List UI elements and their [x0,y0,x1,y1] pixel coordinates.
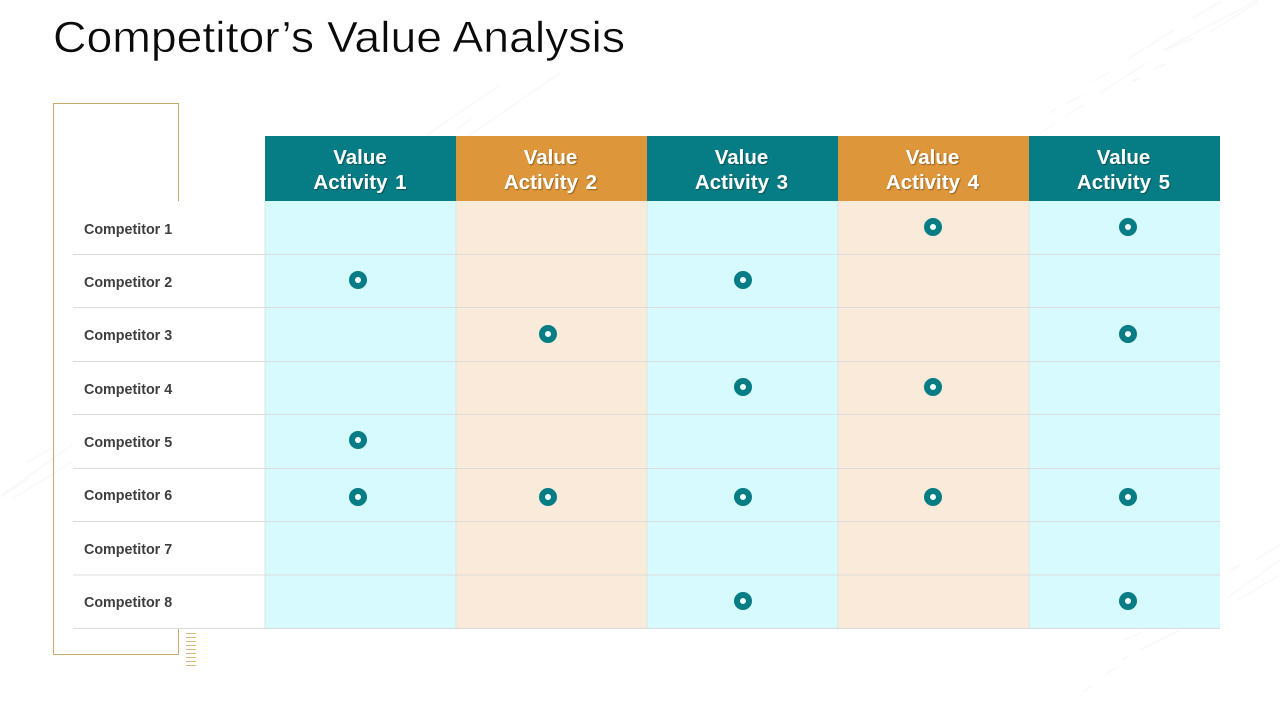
header: Value Activity 1 [265,136,456,201]
column shading [265,201,1220,628]
header: Value Activity 4 [838,136,1029,201]
row labels: Competitor 7 [84,542,172,558]
header: Value Activity 3: Value [715,146,768,169]
row labels: Competitor 1 [84,222,172,238]
header: Value Activity 2: Activity 2 [504,171,597,194]
header: Value Activity 4: Value [906,146,959,169]
row labels: Competitor 2 [84,275,172,291]
header: Value Activity 3 [647,136,838,201]
header: Value Activity 4: Activity 4 [886,171,980,194]
header: Value Activity 3: Activity 3 [695,171,788,194]
header: Value Activity 5 [1029,136,1220,201]
row labels: Competitor 5 [84,435,172,451]
header: Value Activity 1: Value [333,146,387,169]
row labels: Competitor 6 [84,488,172,504]
row labels: Competitor 8 [84,595,172,611]
header: Value Activity 2 [456,136,647,201]
value activity table [73,136,1220,628]
decorative frame [54,104,178,654]
row labels: Competitor 4 [84,382,172,398]
row labels: Competitor 3 [84,328,172,344]
header: Value Activity 1: Activity 1 [313,171,407,194]
value markers [352,221,1134,607]
title: Competitor’s Value Analysis [53,13,625,62]
header: Value Activity 5: Activity 5 [1077,171,1170,194]
header: Value Activity 5: Value [1097,146,1150,169]
row labels [84,222,172,611]
ladder ornament [186,634,196,666]
header: Value Activity 2: Value [524,146,577,169]
